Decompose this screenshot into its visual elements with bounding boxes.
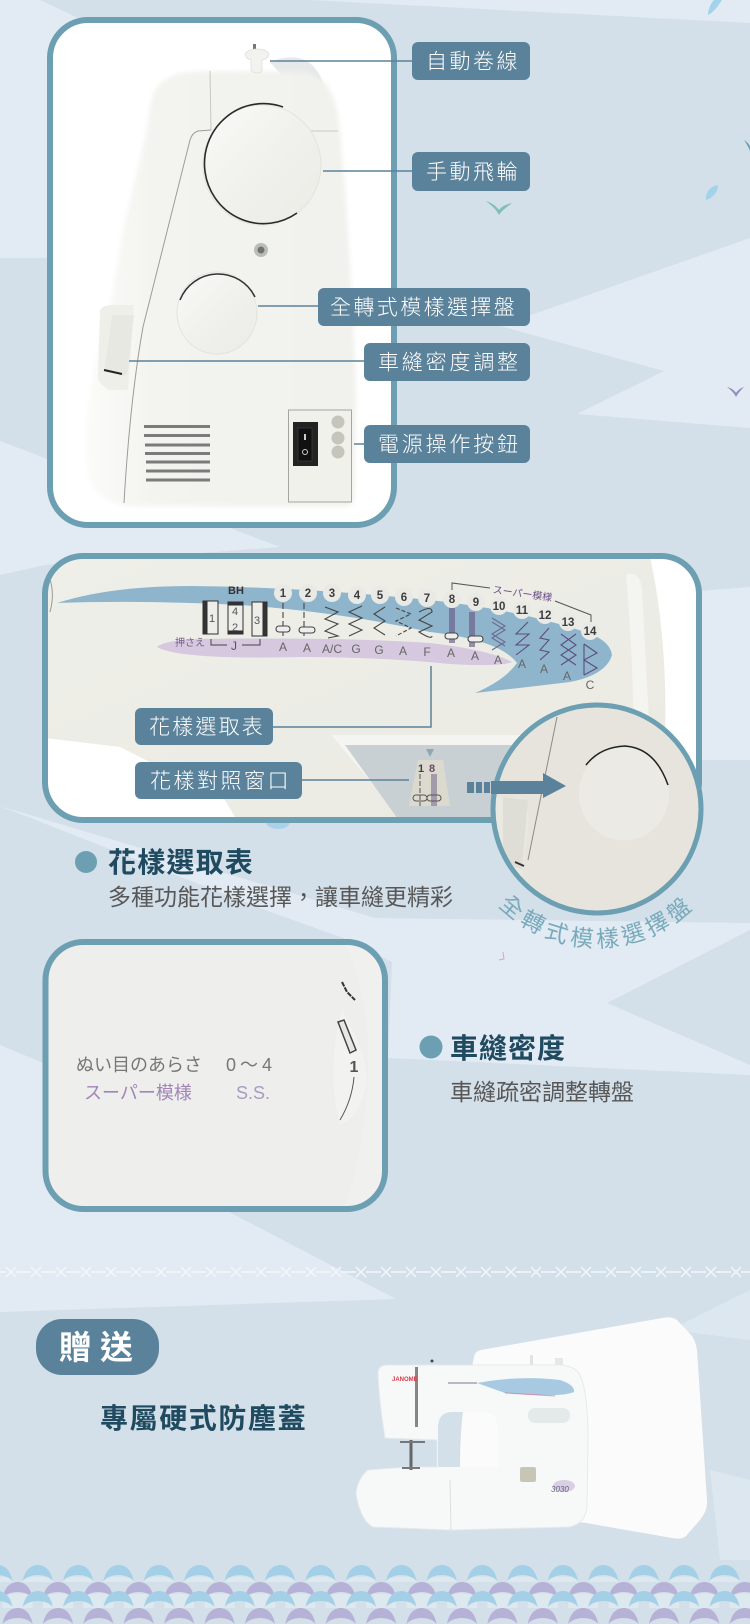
panel: stitch chart close-up: BH [228,585,244,597]
panel: stitch density dial: スーパー模様 [84,1083,192,1103]
panel: stitch chart close-up: 3 [329,588,335,600]
section text: stitch density [420,1033,634,1105]
pattern window [409,749,450,806]
section text: pattern chart [75,847,453,910]
badge: gift [36,1319,159,1375]
icon: small tick [499,952,504,960]
panel: stitch density dial [46,942,385,1209]
label: rotary pattern dial: 全轉式模樣選擇盤 [330,296,517,320]
panel: stitch chart close-up: 押さえ [175,636,205,649]
label: pattern chart: 花樣選取表 [149,716,265,739]
chart: foot letters: A [563,669,571,683]
section text: stitch density: 車縫密度 [450,1033,566,1064]
section text: pattern chart: 多種功能花樣選擇，讓車縫更精彩 [108,884,453,910]
chart: foot letters: G [351,642,361,656]
chart: foot letters: C [586,678,595,692]
leader lines: chart [273,666,431,780]
decorative scallop border [0,1565,750,1624]
chart: super pattern bracket [452,583,591,622]
label: power button: 電源操作按鈕 [378,434,521,456]
pattern window: 1 [418,763,424,775]
panel: machine side view [50,20,394,525]
icon: teal check right edge [744,140,750,151]
panel: stitch chart close-up: 11 [516,605,529,617]
panel: stitch chart close-up: 1 [209,613,215,625]
chart: foot letters: A [494,653,502,667]
panel: stitch chart close-up: 2 [232,622,238,634]
decorative stitch line [0,1266,750,1278]
chart: foot letters: A/C [322,642,342,656]
icon: leaf top right [708,0,722,15]
chart: foot letters: F [423,645,431,659]
dust cover and sewing machine: 3030 [551,1485,569,1494]
label: auto winding: 自動卷線 [426,50,520,74]
panel: stitch chart close-up: 9 [473,597,479,609]
decoration: blue blob under panel [266,815,290,829]
panel: stitch chart close-up: 5 [377,590,384,602]
panel: stitch chart close-up: 10 [493,601,505,613]
panel: stitch chart close-up: 8 [449,594,456,606]
chart: stitch symbols [276,603,597,675]
label: stitch density: 車縫密度調整 [378,352,521,374]
chart: blue swoosh [57,586,612,693]
chart: foot letters: A [447,646,455,660]
chart: foot letters: A [399,644,407,658]
leader lines: machine side [129,61,412,444]
label: pattern window [135,762,302,799]
label: auto winding [412,42,530,80]
pattern window: 8 [429,763,435,775]
icon: leaf right [706,185,718,200]
panel: stitch density dial: 1 [350,1059,359,1076]
label: handwheel: 手動飛輪 [426,161,520,184]
section text: stitch density: 車縫疏密調整轉盤 [450,1079,634,1105]
chart: foot letters: A [518,657,526,671]
icon: green check [486,201,512,215]
chart: foot letters: A [540,662,548,676]
chart: number discs [274,584,599,640]
badge: gift: 贈送 [59,1329,141,1366]
arrow: to rotary dial [467,773,566,798]
panel: stitch chart close-up: 1 [280,588,287,600]
chart: lavender band [157,638,512,665]
machine side body [86,44,356,507]
panel: stitch chart close-up: 4 [354,590,361,602]
dust cover and sewing machine: JANOME [392,1377,418,1383]
chart: foot letters: A [303,641,311,655]
chart: foot letters: G [374,643,384,657]
chart: foot letters: A [471,649,479,663]
panel: stitch density dial: ぬい目のあらさ [76,1055,202,1075]
section text: pattern chart: 花樣選取表 [108,847,254,878]
panel: stitch density dial: S.S. [236,1083,270,1103]
panel: stitch chart close-up [45,556,699,822]
panel: stitch chart close-up: 13 [562,617,574,629]
chart: foot letters [279,642,594,689]
panel: stitch chart close-up: 3 [254,615,260,627]
label: pattern chart [135,708,273,745]
chart: foot letters: A [279,640,287,654]
label: rotary pattern dial [318,288,530,326]
panel: stitch chart close-up: 4 [232,606,238,618]
panel: stitch density dial: 0～4 [226,1055,276,1075]
label: handwheel [412,152,530,191]
panel: stitch chart close-up: 2 [305,588,311,600]
chart: super pattern bracket: スーパー模様 [492,583,553,604]
text: dust cover: 專屬硬式防塵蓋 [100,1403,307,1434]
panel: stitch chart close-up: J [231,639,237,653]
chart: buttonhole icons [203,601,267,636]
label: stitch density [364,343,530,381]
dust cover and sewing machine [356,1317,707,1539]
icon: purple check [727,387,744,397]
panel: stitch chart close-up: 7 [424,593,430,605]
panel: stitch chart close-up: 6 [401,592,407,604]
machine [356,1365,588,1530]
label: pattern window: 花樣對照窗口 [150,770,291,793]
magnifier circle: rotary dial [492,705,701,913]
curved caption: rotary dial: 全轉式模樣選擇盤 [498,895,693,949]
panel: stitch chart close-up: 12 [539,610,551,622]
panel: stitch chart close-up: 14 [584,626,597,638]
label: power button [364,425,530,463]
